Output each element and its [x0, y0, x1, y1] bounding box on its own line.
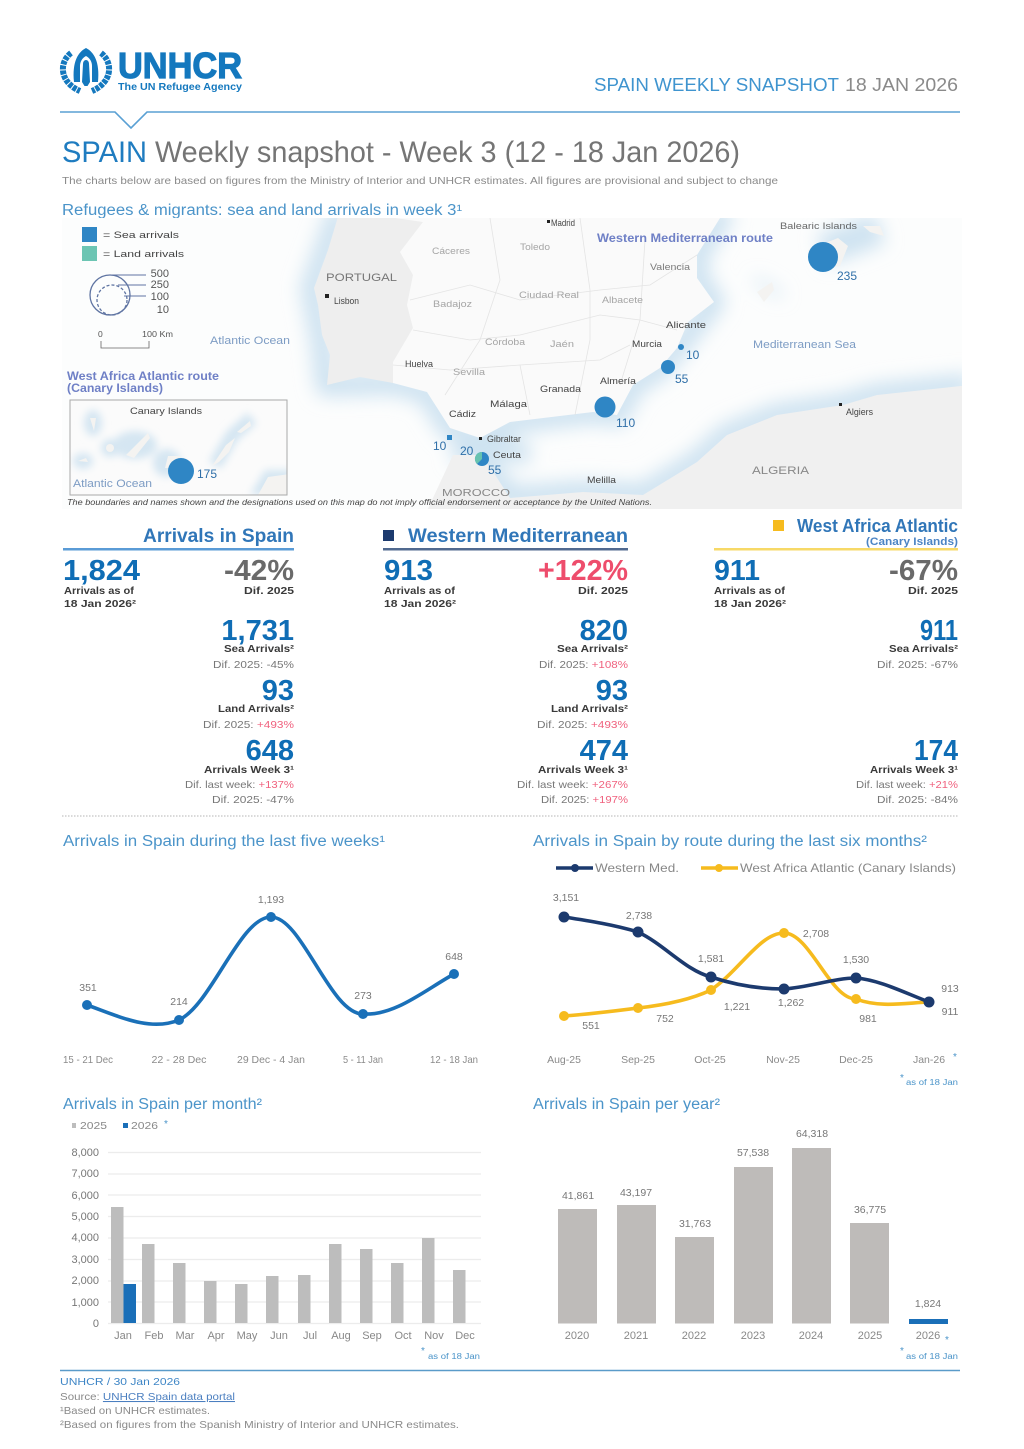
note: as of 18 Jan	[906, 1352, 958, 1361]
scale bar: 0	[98, 329, 103, 339]
bubble values: 20	[460, 444, 474, 458]
x axis labels: 2025	[858, 1330, 882, 1342]
x axis labels: Jan	[114, 1330, 132, 1342]
panel: map of arrivals: Murcia	[632, 339, 663, 350]
legend: sea and land arrivals	[82, 227, 184, 261]
bubble values: 55	[675, 372, 689, 386]
bar: 2026	[909, 1319, 948, 1324]
y axis labels: 0	[93, 1318, 99, 1330]
series: West Africa Atlantic	[559, 928, 929, 1021]
x axis labels: Aug	[331, 1330, 351, 1342]
panel: West Africa Atlantic: Dif. 2025: -84%	[877, 794, 958, 806]
panel: Western Mediterranean: 18 Jan 2026²	[384, 598, 457, 610]
panel: map of arrivals: Alicante	[666, 320, 706, 331]
data labels: 214	[170, 996, 188, 1008]
footer: sources and notes: Source: UNHCR Spain data portal	[60, 1391, 235, 1403]
x axis labels: Oct	[394, 1330, 412, 1342]
land arrivals: 93	[262, 675, 294, 707]
legend: 2025	[80, 1120, 107, 1132]
header label: 18 JAN 2026	[845, 74, 958, 95]
panel: Western Mediterranean: Arrivals as of	[384, 585, 456, 597]
panel: Western Mediterranean: Dif. last week: +267%	[517, 779, 628, 791]
data labels: 913	[941, 983, 959, 995]
panel: arrivals in Spain	[63, 526, 295, 806]
legend: bubble sizes: 250	[151, 279, 169, 291]
panel: map of arrivals: Málaga	[490, 399, 528, 410]
data labels: 1,824	[915, 1298, 941, 1310]
panel: map of arrivals: ALGERIA	[752, 465, 810, 477]
data labels: 3,151	[553, 892, 579, 904]
legend: sea and land arrivals: = Sea arrivals	[103, 230, 179, 241]
legend: bubble sizes: 500	[151, 268, 169, 280]
panel: map of arrivals: Almería	[600, 376, 637, 387]
x axis labels: 2022	[682, 1330, 706, 1342]
country labels: PORTUGAL	[326, 272, 397, 284]
panel: map of arrivals: Granada	[540, 384, 582, 395]
legend: West Africa Atlantic (Canary Islands)	[740, 861, 956, 875]
panel: West Africa Atlantic: Arrivals Week 3¹	[870, 764, 959, 776]
change: +122%	[538, 555, 628, 587]
chart title: Arrivals in Spain by route during the last six months²	[533, 833, 927, 850]
note: as of 18 Jan	[428, 1352, 480, 1361]
map disclaimer: The boundaries and names shown and the designations used on this map do not imply official endorsement or acceptance by the United Nations.	[67, 497, 652, 507]
x axis labels	[63, 1054, 478, 1066]
total: 913	[384, 555, 433, 587]
data labels: 351	[79, 982, 97, 994]
panel: West Africa Atlantic: West Africa Atlantic	[797, 516, 958, 536]
sea arrivals: 1,731	[221, 615, 294, 647]
panel: map of arrivals: Ciudad Real	[519, 290, 579, 301]
panel: map of arrivals: Western Mediterranean route	[597, 233, 773, 245]
legend: bubble sizes: 10	[157, 304, 169, 316]
chart: arrivals per month	[63, 1096, 481, 1361]
footer: sources and notes	[60, 1376, 459, 1431]
x axis labels: 2020	[565, 1330, 589, 1342]
inset map: Canary Islands: Canary Islands	[130, 406, 202, 417]
note	[421, 1346, 480, 1361]
weekly arrivals: 648	[246, 735, 294, 767]
legend: bubble sizes	[90, 268, 169, 316]
y axis labels: 8,000	[71, 1147, 99, 1159]
x axis labels: 22 - 28 Dec	[152, 1054, 206, 1066]
x axis labels: Aug-25	[547, 1054, 581, 1066]
data labels	[553, 892, 959, 1032]
panel: Western Mediterranean	[383, 526, 629, 806]
footer: sources and notes: UNHCR / 30 Jan 2026	[60, 1376, 180, 1388]
panel: West Africa Atlantic: Dif. 2025	[908, 585, 958, 597]
legend	[72, 1119, 168, 1132]
data labels: 43,197	[620, 1187, 652, 1199]
panel: West Africa Atlantic: 18 Jan 2026²	[714, 598, 787, 610]
panel: Western Mediterranean: Dif. 2025: +493%	[537, 719, 628, 731]
chart: arrivals by route during the last six months	[533, 833, 959, 1087]
bubble values: 235	[837, 269, 857, 283]
note: *	[900, 1073, 904, 1084]
panel: map of arrivals: Huelva	[405, 359, 434, 370]
data labels: 64,318	[796, 1128, 828, 1140]
x axis labels: 29 Dec - 4 Jan	[237, 1054, 305, 1066]
heading	[383, 530, 394, 541]
panel: arrivals in Spain: Arrivals Week 3¹	[204, 764, 295, 776]
gridlines	[108, 1152, 481, 1324]
panel: arrivals in Spain: Arrivals as of	[64, 585, 135, 597]
data labels	[79, 894, 463, 1008]
bubble values: 110	[616, 416, 635, 430]
note	[900, 1335, 958, 1361]
y axis labels: 5,000	[71, 1211, 99, 1223]
data labels: 1,530	[843, 954, 869, 966]
bubble values: 10	[686, 348, 700, 362]
panel: map of arrivals: Cádiz	[449, 409, 476, 420]
x axis labels	[565, 1330, 940, 1342]
weekly arrivals: 174	[914, 735, 958, 767]
legend: bubble sizes: 100	[151, 291, 169, 303]
bars	[558, 1148, 889, 1324]
data labels: 31,763	[679, 1218, 711, 1230]
y axis labels: 4,000	[71, 1232, 99, 1244]
x axis labels: Jul	[303, 1330, 317, 1342]
chart title: Arrivals in Spain per month²	[63, 1096, 262, 1113]
panel: West Africa Atlantic: Dif. 2025: -67%	[877, 659, 958, 671]
note: *	[900, 1346, 904, 1357]
x axis labels: Nov	[424, 1330, 444, 1342]
data labels: 551	[582, 1020, 600, 1032]
panel: arrivals in Spain: Dif. 2025: -47%	[212, 794, 294, 806]
scale bar: 100 Km	[142, 329, 173, 339]
header label	[594, 74, 958, 95]
x axis labels: Apr	[207, 1330, 225, 1342]
panel: map of arrivals: Gibraltar	[487, 434, 521, 445]
data labels: 648	[445, 951, 463, 963]
panel: map of arrivals: Algiers	[846, 407, 873, 418]
x axis labels: Jan-26	[913, 1054, 945, 1066]
land arrivals: 93	[596, 675, 628, 707]
panel: map of arrivals: Valencia	[650, 262, 691, 273]
heading: Arrivals in Spain	[143, 526, 294, 547]
note: *	[953, 1052, 957, 1063]
x axis labels: 5 - 11 Jan	[343, 1054, 383, 1066]
weekly arrivals: 474	[580, 735, 628, 767]
panel: arrivals in Spain: Dif. last week: +137%	[185, 779, 294, 791]
coastal glow	[312, 210, 970, 498]
inset map: Canary Islands: 175	[197, 467, 217, 481]
x axis labels: Dec-25	[839, 1054, 873, 1066]
bubble: Gran Canaria	[168, 458, 194, 484]
panel: arrivals in Spain: Dif. 2025: -45%	[213, 659, 294, 671]
panel: Western Mediterranean: Dif. 2025	[578, 585, 628, 597]
x axis labels: Sep-25	[621, 1054, 655, 1066]
total: 911	[714, 555, 760, 587]
panel: map of arrivals: Mediterranean Sea	[753, 339, 857, 351]
panel: map of arrivals	[62, 210, 970, 515]
panel: map of arrivals: Ceuta	[493, 450, 522, 461]
panel: Western Mediterranean: Land Arrivals²	[551, 703, 629, 715]
scale bar	[98, 329, 173, 348]
panel: map of arrivals: Badajoz	[433, 299, 472, 310]
panel: map of arrivals: Lisbon	[334, 296, 359, 307]
panel: map of arrivals: Sevilla	[453, 367, 486, 378]
data labels: 752	[656, 1013, 674, 1025]
chart: arrivals during the last five weeks	[63, 833, 478, 1066]
data labels: 2,708	[803, 928, 829, 940]
panel: West Africa Atlantic: Dif. last week: +21%	[856, 779, 958, 791]
y axis labels: 7,000	[71, 1168, 99, 1180]
series: Western Med	[558, 912, 934, 1008]
inset map: Canary Islands: Atlantic Ocean	[73, 478, 152, 490]
panel: arrivals in Spain: Sea Arrivals²	[224, 643, 295, 655]
place names: Cáceres	[432, 246, 470, 257]
data labels	[562, 1128, 941, 1310]
note: *	[945, 1335, 949, 1346]
panel: Western Mediterranean: Sea Arrivals²	[557, 643, 629, 655]
panel: map of arrivals: Melilla	[587, 475, 617, 486]
data labels: 1,221	[724, 1001, 750, 1013]
footer: sources and notes: ²Based on figures from the Spanish Ministry of Interior and UNHCR estimates.	[60, 1419, 459, 1431]
chart: arrivals per year	[533, 1096, 958, 1361]
panel: Western Mediterranean: Dif. 2025: +108%	[539, 659, 628, 671]
y axis labels: 1,000	[71, 1297, 99, 1309]
bubble values: 55	[488, 463, 502, 477]
capital markers	[325, 220, 842, 440]
land: North Africa	[425, 385, 970, 515]
x axis labels: 15 - 21 Dec	[63, 1054, 113, 1066]
panel: West Africa Atlantic: (Canary Islands)	[866, 536, 958, 548]
land: Spain	[393, 218, 720, 438]
legend: sea and land arrivals: = Land arrivals	[103, 249, 184, 260]
data labels: 36,775	[854, 1204, 886, 1216]
panel: arrivals in Spain: 18 Jan 2026²	[64, 598, 137, 610]
data labels: 911	[942, 1006, 959, 1018]
panel: arrivals in Spain: Dif. 2025: +493%	[203, 719, 294, 731]
islands	[757, 226, 884, 302]
panel: West Africa Atlantic: Sea Arrivals²	[889, 643, 959, 655]
data labels: 273	[354, 990, 372, 1002]
logo tagline: The UN Refugee Agency	[118, 81, 242, 93]
x axis labels: Dec	[455, 1330, 475, 1342]
data labels: 41,861	[562, 1190, 594, 1202]
panel: map of arrivals: Balearic Islands	[780, 221, 857, 232]
sea arrivals: 820	[580, 615, 628, 647]
panel: West Africa Atlantic: Arrivals as of	[714, 585, 786, 597]
map heading: Refugees & migrants: sea and land arrivals in week 3¹	[62, 202, 462, 219]
inset heading: West Africa Atlantic route	[67, 371, 219, 395]
data labels: 1,193	[258, 894, 284, 906]
bar: 2026	[124, 1284, 136, 1323]
bars: 2025	[111, 1207, 466, 1323]
bubble: Ceuta land share	[475, 452, 482, 464]
panel: Western Mediterranean: Arrivals Week 3¹	[538, 764, 629, 776]
x axis labels: 12 - 18 Jan	[430, 1054, 478, 1066]
note	[900, 1052, 958, 1087]
title: Weekly snapshot - Week 3 (12 - 18 Jan 2026)	[155, 136, 740, 169]
panel: map of arrivals: MOROCCO	[442, 488, 510, 499]
land: Portugal	[314, 210, 423, 385]
footer: sources and notes: ¹Based on UNHCR estimates.	[60, 1405, 210, 1417]
inset map: Canary Islands	[70, 400, 292, 495]
panel: map of arrivals: Madrid	[551, 218, 575, 229]
data labels: 1,581	[698, 953, 724, 965]
y axis labels: 3,000	[71, 1254, 99, 1266]
x axis labels	[547, 1054, 945, 1066]
sea arrivals: 911	[920, 615, 958, 647]
chart title: Arrivals in Spain per year²	[533, 1096, 720, 1113]
provincial borders	[393, 218, 697, 415]
x axis labels: Nov-25	[766, 1054, 800, 1066]
note: as of 18 Jan	[906, 1078, 958, 1087]
y axis labels	[71, 1147, 99, 1330]
subtitle: The charts below are based on figures from the Ministry of Interior and UNHCR estimates. All figures are provisional and subject to change	[62, 175, 778, 187]
line series	[87, 917, 454, 1024]
panel: arrivals in Spain: Dif. 2025	[244, 585, 294, 597]
sea labels: Atlantic Ocean	[210, 335, 290, 347]
panel: map of arrivals: Córdoba	[485, 337, 526, 348]
total: 1,824	[63, 555, 140, 587]
x axis labels: 2023	[741, 1330, 765, 1342]
x axis labels: Mar	[176, 1330, 195, 1342]
panel: map of arrivals: Albacete	[602, 295, 643, 306]
x axis labels: 2026	[916, 1330, 940, 1342]
change: -42%	[224, 555, 294, 587]
y axis labels: 6,000	[71, 1190, 99, 1202]
chart title: Arrivals in Spain during the last five weeks¹	[63, 833, 385, 850]
legend: *	[164, 1119, 168, 1130]
x axis labels: Oct-25	[694, 1054, 726, 1066]
note: *	[421, 1346, 425, 1357]
x axis labels: Jun	[270, 1330, 288, 1342]
legend: Western Med.	[595, 861, 679, 875]
legend	[556, 861, 956, 875]
bubble values: 10	[433, 439, 447, 453]
heading	[773, 520, 784, 531]
panel: Western Mediterranean: Dif. 2025: +197%	[541, 794, 628, 806]
title: SPAIN	[62, 136, 147, 169]
bubbles: arrivals by location	[447, 242, 838, 466]
data labels: 981	[859, 1013, 877, 1025]
logo: UNHCR	[63, 45, 242, 93]
x axis labels: May	[237, 1330, 258, 1342]
x axis labels: 2024	[799, 1330, 823, 1342]
data labels: 57,538	[737, 1147, 769, 1159]
x axis labels: Sep	[362, 1330, 382, 1342]
bubble values	[433, 269, 857, 477]
legend: 2026	[131, 1120, 158, 1132]
x axis labels: Feb	[145, 1330, 163, 1342]
header rule with chevron	[60, 112, 960, 128]
panel: arrivals in Spain: Land Arrivals²	[218, 703, 295, 715]
inset heading: West Africa Atlantic route: (Canary Islands)	[67, 383, 163, 395]
logo wordmark: UNHCR	[118, 45, 242, 86]
change: -67%	[889, 555, 958, 587]
x axis labels: 2021	[624, 1330, 648, 1342]
x axis labels	[114, 1330, 475, 1342]
panel: map of arrivals: Toledo	[520, 242, 550, 253]
data labels: 1,262	[778, 997, 804, 1009]
y axis labels: 2,000	[71, 1275, 99, 1287]
icon: laurel wreath and sheltering hands	[63, 48, 109, 91]
panel: map of arrivals: Jaén	[550, 339, 574, 350]
inset heading: West Africa Atlantic route: West Africa Atlantic route	[67, 371, 219, 383]
data labels: 2,738	[626, 910, 652, 922]
panel: West Africa Atlantic	[714, 516, 959, 806]
header label: SPAIN WEEKLY SNAPSHOT	[594, 74, 839, 95]
panel: Western Mediterranean: Western Mediterranean	[408, 526, 628, 547]
